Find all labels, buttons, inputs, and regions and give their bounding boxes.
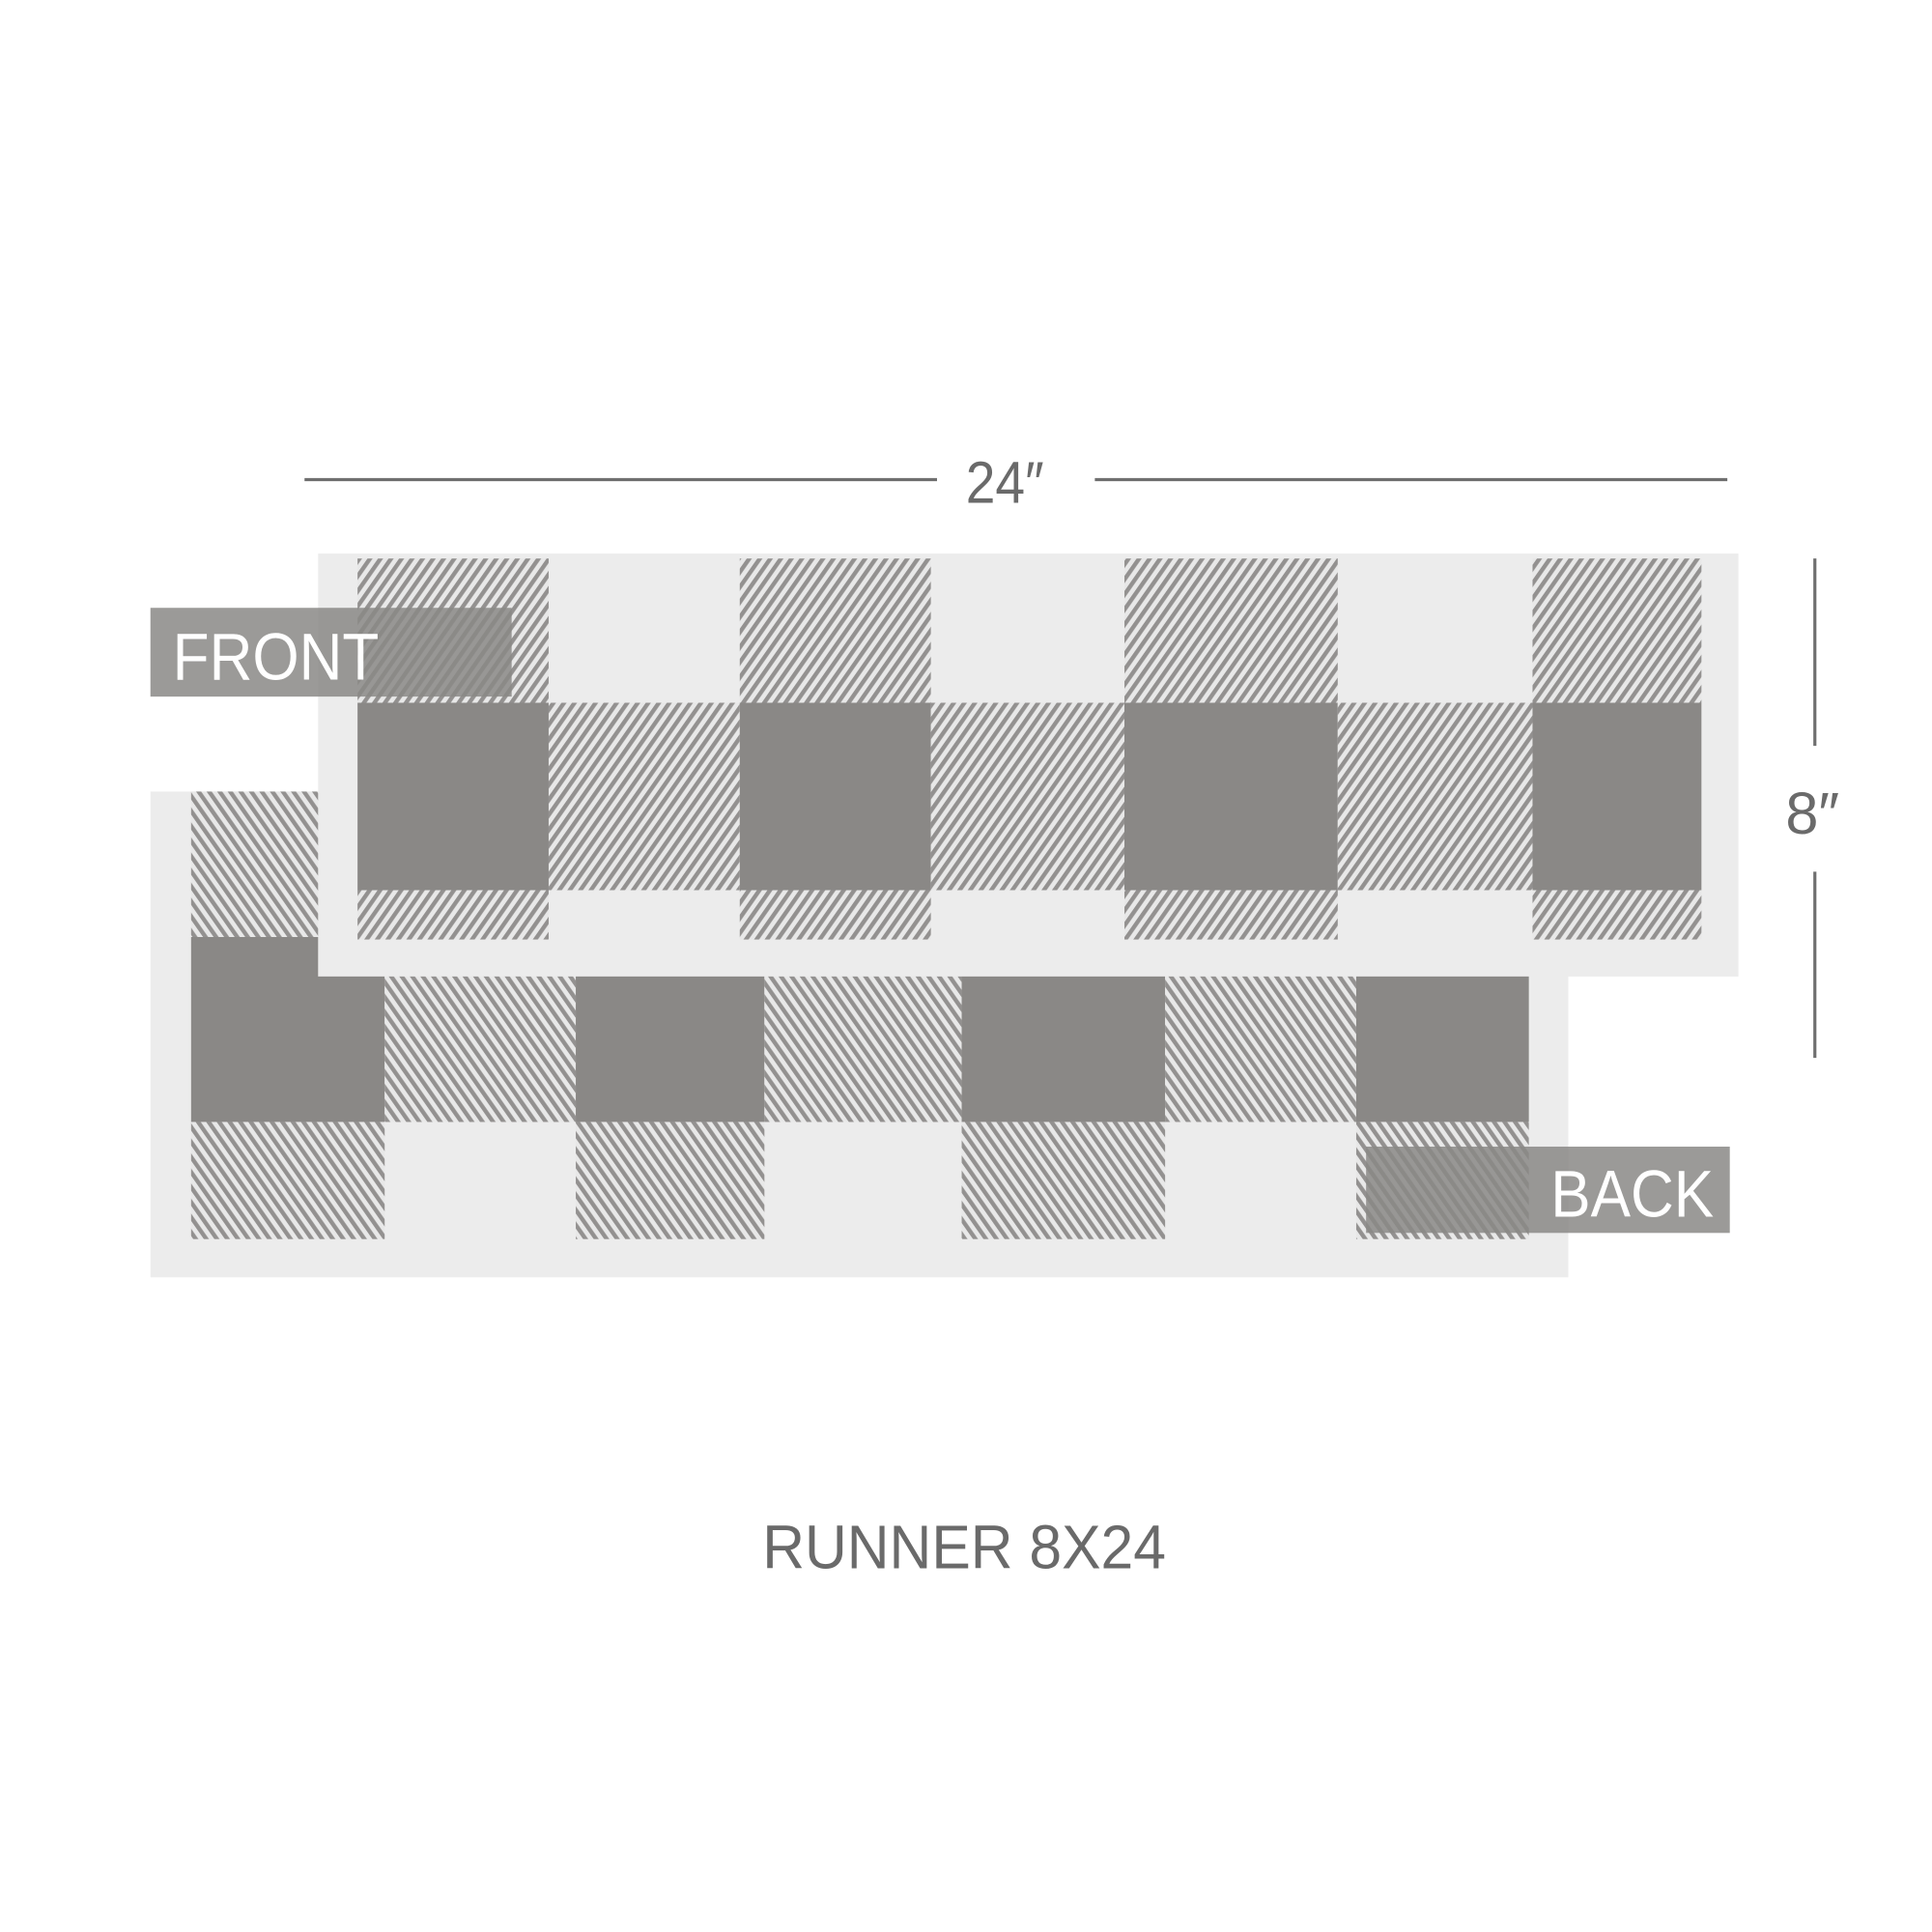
label: FRONT: FRONT: [173, 619, 379, 694]
runner: front: [318, 554, 1739, 977]
runner: back: [151, 791, 1568, 1277]
dimension: height 8 inches: 8″: [1785, 781, 1839, 846]
label: FRONT: [151, 608, 512, 696]
label: BACK: [1366, 1147, 1730, 1233]
caption: RUNNER 8X24: [762, 1514, 1166, 1582]
dimension: width 24 inches: 24″: [966, 450, 1044, 516]
label: BACK: BACK: [1550, 1157, 1714, 1231]
